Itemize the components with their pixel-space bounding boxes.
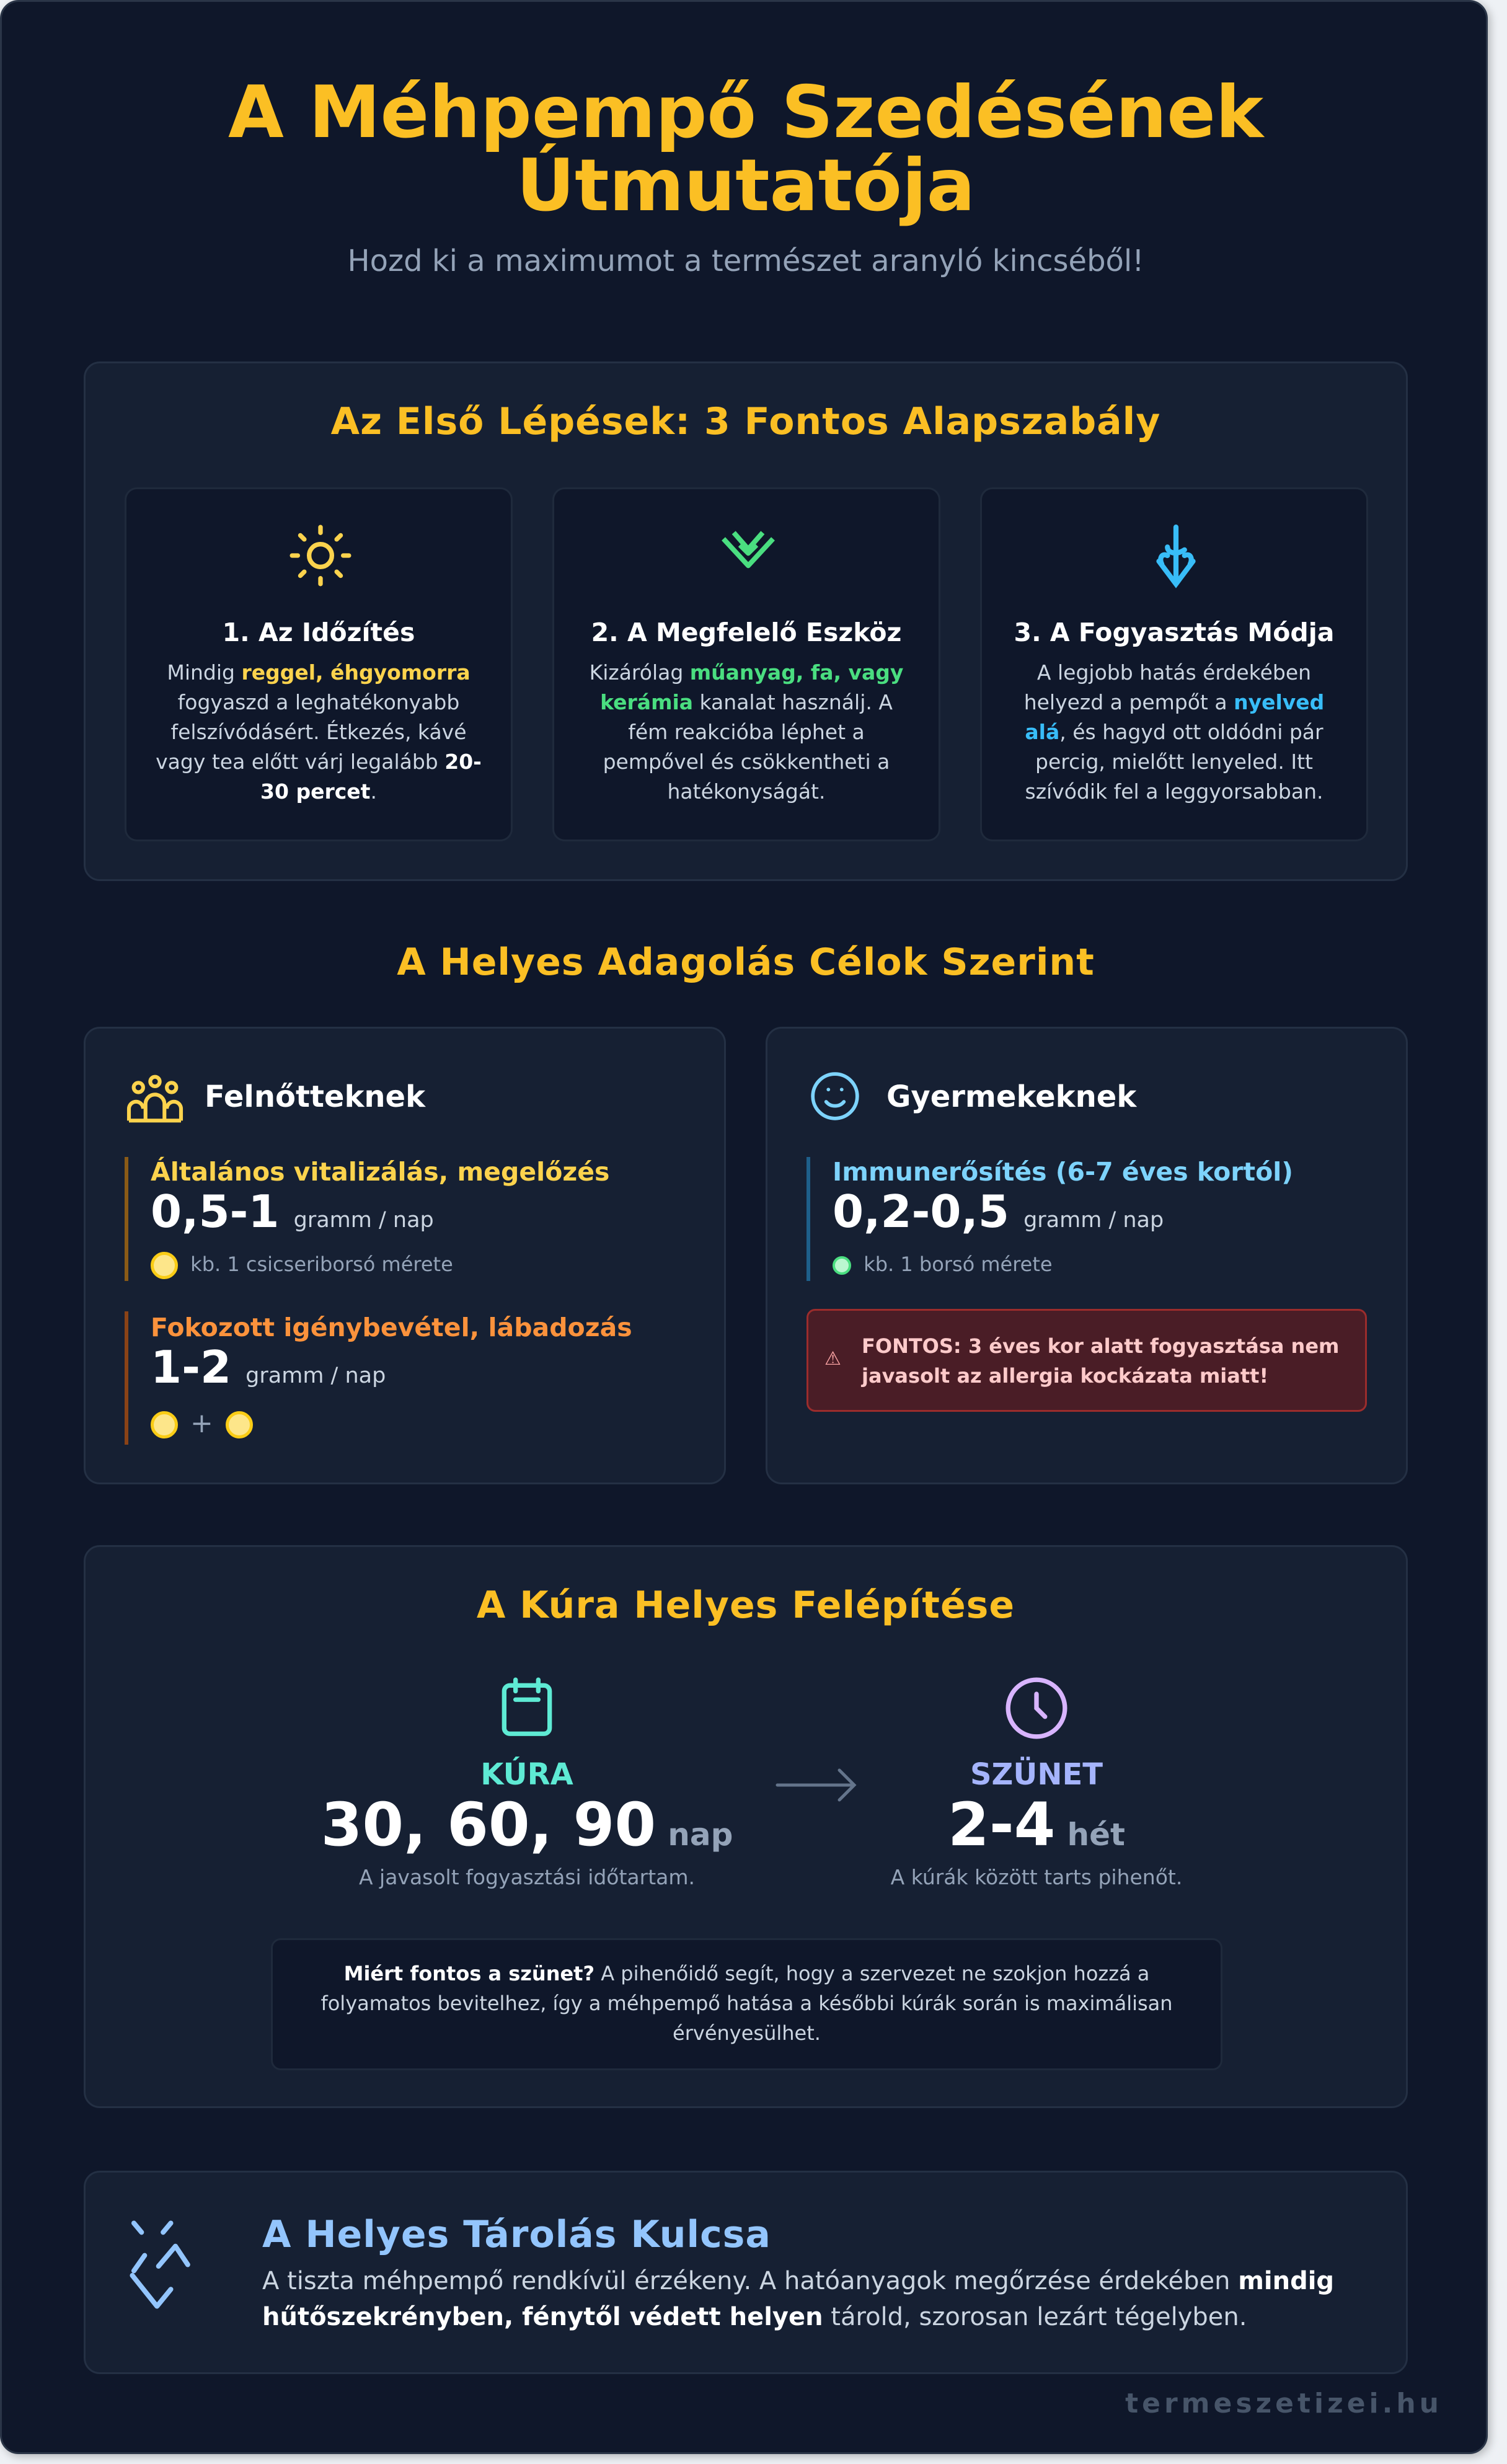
- card: timing: [125, 487, 513, 841]
- storage title: A Helyes Tárolás Kulcsa: [262, 2213, 771, 2256]
- item: general: 0,5-1 gramm / nap: [151, 1185, 434, 1238]
- block: course: 30, 60, 90 nap: [321, 1790, 733, 1859]
- item: immune: Immunerősítés (6-7 éves kortól): [833, 1157, 1293, 1187]
- panel title: Gyermekeknek: [886, 1079, 1136, 1114]
- panel: storage: [84, 2171, 1408, 2374]
- title: Útmutatója: [516, 144, 975, 228]
- item: intensive: 1-2 gramm / nap: [151, 1341, 386, 1393]
- note: why pause: [271, 1938, 1222, 2070]
- card title: 1. Az Időzítés: [223, 618, 415, 647]
- callout: warning: FONTOS: 3 éves kor alatt fogyasztása nem javasolt az allergia kockázata miatt!: [862, 1334, 1339, 1388]
- icon: people: [126, 1075, 183, 1122]
- callout: warning: ⚠: [824, 1348, 841, 1370]
- callout: warning: [807, 1309, 1367, 1412]
- block: course: KÚRA: [480, 1757, 573, 1792]
- icon: tongue: [1156, 525, 1196, 588]
- card: consumption: [980, 487, 1368, 841]
- title: A Méhpempő Szedésének: [228, 71, 1263, 154]
- item: intensive: +: [190, 1407, 213, 1439]
- panel: course: [84, 1545, 1408, 2108]
- card text: A legjobb hatás érdekében helyezd a pempőt a nyelved alá, és hagyd ott oldódni pár percig, mielőtt lenyeled. Itt szívódik fel a leggyorsabban.: [1024, 660, 1324, 804]
- icon: sun: [290, 525, 351, 587]
- heading: rules: Az Első Lépések: 3 Fontos Alapszabály: [331, 400, 1160, 443]
- icon: smiley: [811, 1072, 859, 1120]
- panel: basic rules: [84, 361, 1408, 881]
- item: immune: kb. 1 borsó mérete: [864, 1252, 1053, 1276]
- storage text: A tiszta méhpempő rendkívül érzékeny. A hatóanyagok megőrzése érdekében mindig hűtőszekrényben, fénytől védett helyen tárold, szorosan lezárt tégelyben.: [262, 2267, 1334, 2331]
- footer: brand: termeszetizei.hu: [1125, 2388, 1443, 2419]
- block: pause: 2-4 hét: [948, 1790, 1125, 1859]
- block: pause: SZÜNET: [970, 1757, 1103, 1792]
- item: intensive: Fokozott igénybevétel, lábadozás: [151, 1313, 632, 1342]
- icon: calendar: [502, 1678, 552, 1736]
- item: general: [125, 1157, 683, 1281]
- title: [228, 71, 1265, 228]
- note: why pause: Miért fontos a szünet? A pihenőidő segít, hogy a szervezet ne szokjon hozzá a folyamatos bevitelhez, így a méhpempő hatása a későbbi kúrák során is maximálisan érvényesülhet.: [320, 1962, 1173, 2045]
- item: immune: 0,2-0,5 gramm / nap: [833, 1185, 1164, 1238]
- card text: Kizárólag műanyag, fa, vagy kerámia kanalat használj. A fém reakcióba léphet a pempővel és csökkentheti a hatékonyságát.: [590, 660, 903, 804]
- item: immune: [807, 1157, 1377, 1281]
- card title: 3. A Fogyasztás Módja: [1014, 618, 1334, 647]
- block: pause: A kúrák között tarts pihenőt.: [891, 1865, 1182, 1889]
- card title: 2. A Megfelelő Eszköz: [591, 618, 901, 647]
- card text: Mindig reggel, éhgyomorra fogyaszd a leghatékonyabb felszívódásért. Étkezés, kávé vagy tea előtt várj legalább 20-30 percet.: [156, 660, 482, 804]
- item: general: Általános vitalizálás, megelőzés: [151, 1157, 609, 1187]
- heading: course: A Kúra Helyes Felépítése: [477, 1584, 1015, 1627]
- block: pause: [890, 1678, 1182, 1889]
- block: course: [321, 1678, 733, 1889]
- heading: dosage: A Helyes Adagolás Célok Szerint: [397, 941, 1095, 984]
- item: general: kb. 1 csicseriborsó mérete: [190, 1252, 453, 1276]
- card: tool: [552, 487, 940, 841]
- subtitle: Hozd ki a maximumot a természet aranyló kincséből!: [347, 244, 1144, 278]
- panel: children: [766, 1027, 1408, 1484]
- item: intensive: [125, 1311, 683, 1445]
- panel title: Felnőtteknek: [205, 1079, 425, 1114]
- block: course: A javasolt fogyasztási időtartam.: [359, 1865, 695, 1889]
- icon: storage: [130, 2221, 190, 2309]
- panel: adults: [84, 1027, 726, 1484]
- icon: clock: [1005, 1678, 1067, 1739]
- arrow: [776, 1768, 857, 1802]
- icon: spoon: [722, 531, 775, 568]
